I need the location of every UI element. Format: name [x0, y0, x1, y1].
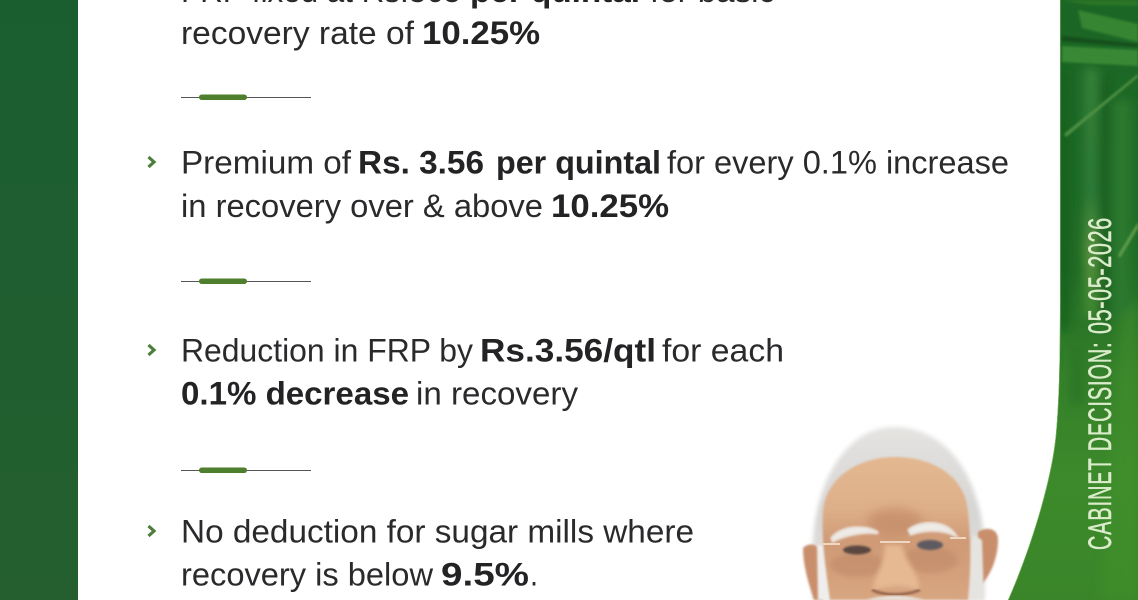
item 2: premium	[148, 144, 1009, 224]
face	[823, 457, 970, 600]
item 3: reduction: in recovery	[416, 376, 578, 412]
glasses	[820, 538, 966, 544]
divider 2	[181, 278, 311, 284]
eyes	[843, 546, 871, 554]
hair	[812, 427, 985, 600]
nose	[873, 545, 919, 590]
date label	[1082, 218, 1118, 550]
brow shading	[867, 508, 923, 536]
item 4: no deduction: No deduction for sugar mills where	[181, 514, 694, 550]
eyebrows	[832, 528, 878, 541]
divider 1	[181, 94, 311, 100]
item 4: no deduction: 9.5%	[441, 556, 529, 592]
item 2: premium: per quintal	[496, 144, 661, 180]
chevron	[148, 526, 154, 536]
band edge	[1008, 0, 1060, 600]
moustache	[866, 596, 925, 600]
item 2: premium: for every 0.1% increase	[667, 144, 1009, 180]
item 3: reduction: Rs.3.56/qtl	[480, 332, 656, 368]
chevron	[148, 157, 154, 167]
item 1: FRP	[181, 0, 775, 51]
side beard	[817, 545, 832, 600]
right ear	[978, 529, 998, 586]
item 3: reduction: 0.1% decrease	[181, 376, 409, 412]
item 4: no deduction: .	[530, 556, 538, 592]
cane stalks	[1060, 66, 1138, 403]
item 3: reduction	[148, 332, 784, 412]
portrait	[803, 427, 998, 600]
item 2: premium: Premium of	[181, 144, 351, 180]
left green band	[0, 0, 78, 600]
item 3: reduction: for each	[662, 332, 784, 368]
item 2: premium: Rs. 3.56	[358, 144, 484, 180]
under-eye shading	[830, 553, 886, 577]
date label: CABINET DECISION:	[1082, 342, 1118, 550]
item 2: premium: in recovery over & above	[181, 188, 543, 224]
item 4: no deduction: recovery is below	[181, 556, 434, 592]
chevron	[148, 345, 154, 355]
left ear	[803, 544, 823, 600]
date label: 05-05-2026	[1082, 218, 1118, 334]
cane leaves	[1060, 0, 1138, 258]
divider 3	[181, 468, 311, 473]
item 1: FRP: recovery rate of	[181, 15, 414, 51]
item 3: reduction: Reduction in FRP by	[181, 332, 473, 368]
item 2: premium: 10.25%	[551, 188, 669, 224]
right sugarcane band	[1000, 0, 1138, 600]
item 4: no deduction	[148, 514, 694, 592]
item 1: FRP: 10.25%	[422, 15, 540, 51]
